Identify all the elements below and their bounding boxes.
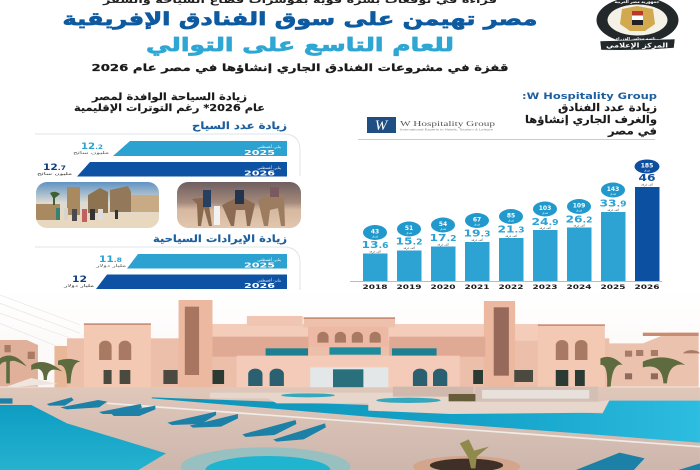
revenue 2025 bar: 2025	[244, 262, 275, 270]
bar 2026	[634, 160, 660, 291]
deck planter	[413, 439, 520, 470]
tourists 2026 bar: يناير- أغسطس	[258, 165, 281, 170]
tourists 2025 bar	[73, 141, 287, 157]
section: tourists heading: زيادة عدد السياح	[192, 121, 287, 132]
revenue 2026 bar: مليار دولار	[62, 283, 94, 288]
tourists 2026 bar	[37, 162, 287, 178]
logo: media center emblem: رئاسة مجلس الوزراء	[616, 36, 659, 41]
panel heading: والغرف الجاري إنشاؤها	[525, 114, 657, 126]
bar 2020: ألف غرفة	[437, 242, 449, 246]
bar 2019	[396, 222, 422, 291]
bar 2022: 85	[507, 212, 515, 220]
revenue 2026 bar	[62, 274, 287, 290]
W Hospitality Group logo: W Hospitality Group	[400, 119, 495, 128]
parasol	[4, 378, 58, 387]
revenue 2025 bar	[94, 254, 287, 270]
panel: hotel projects	[350, 92, 662, 291]
bar 2023: 2023	[532, 284, 558, 291]
bar 2023: ألف غرفة	[539, 226, 551, 230]
bar 2021: 67	[473, 216, 481, 224]
panel: tourism	[35, 92, 301, 290]
bar 2022: 2022	[498, 284, 524, 291]
hotel photo	[0, 290, 700, 470]
sun loungers	[0, 397, 700, 470]
W Hospitality Group logo: International Experts in Hotels, Tourism & Leisure	[400, 128, 494, 132]
bar 2022: 21 .3	[498, 224, 524, 236]
revenue 2026 bar: 2026	[244, 282, 275, 290]
bar 2025: 143	[607, 186, 619, 193]
bar 2021: ألف غرفة	[471, 238, 483, 242]
bar 2020: 2020	[430, 284, 456, 291]
W Hospitality Group logo	[367, 117, 495, 134]
bar 2020: 54	[439, 221, 447, 228]
panel heading: في مصر	[607, 126, 657, 138]
revenue 2025 bar: مليار دولار	[94, 263, 126, 268]
tourists 2025 bar: 2025	[244, 149, 275, 157]
panel heading: زيادة عدد الفنادق	[558, 102, 657, 114]
subtitle: قفزة في مشروعات الفنادق الجاري إنشاؤها في مصر عام 2026	[92, 63, 508, 74]
title line 1: مصر تهيمن على سوق الفنادق الإفريقية	[62, 9, 538, 30]
revenue 2026 bar: 12	[72, 275, 87, 285]
tourists 2026 bar: مليون سائح	[37, 171, 72, 176]
bar 2022	[498, 209, 524, 291]
logo: media center emblem: المركز الإعلامي	[606, 42, 668, 50]
divider	[358, 139, 655, 140]
arched windows	[99, 332, 587, 386]
bar 2021: 19 .3	[464, 228, 490, 240]
pool terrace with jacuzzis	[210, 387, 609, 414]
bar 2023: 24 .9	[532, 217, 558, 228]
bar 2024: فندق	[576, 208, 583, 212]
bar 2018: 2018	[362, 284, 388, 291]
bar 2024: 26 .2	[566, 214, 592, 226]
photo: Karnak temple tourists	[36, 182, 159, 228]
round pool	[181, 447, 350, 470]
tourists 2025 bar: يناير- أغسطس	[258, 144, 281, 149]
bar 2026: ألف غرفة	[641, 182, 653, 186]
bar 2024	[566, 199, 592, 291]
bar 2019: فندق	[406, 231, 413, 235]
bar 2020: فندق	[440, 227, 447, 231]
left foreground pool	[0, 405, 166, 470]
right side wing	[605, 333, 700, 387]
bar 2022: فندق	[508, 218, 515, 222]
main building	[67, 300, 609, 388]
bar 2020: 17 .2	[430, 233, 456, 244]
back pool	[152, 397, 700, 443]
tourists 2025 bar: مليون سائح	[73, 150, 109, 155]
bar 2026: 185	[641, 162, 653, 170]
panel heading	[74, 92, 265, 114]
bar 2023: 103	[539, 205, 551, 212]
panel heading	[522, 92, 658, 138]
panel heading: :W Hospitality Group	[522, 92, 658, 102]
revenue 2026 bar: يناير- أغسطس	[258, 278, 281, 282]
bar 2025: فندق	[610, 192, 617, 196]
bar 2019: 15 .2	[396, 236, 422, 248]
bar 2024: ألف غرفة	[573, 224, 585, 228]
revenue 2025 bar: 11 .8	[99, 255, 123, 265]
bar 2023	[532, 202, 558, 291]
bar 2018: فندق	[372, 234, 379, 238]
bar 2019: 2019	[396, 284, 422, 291]
bar 2022: ألف غرفة	[505, 234, 517, 238]
bar 2026: فندق	[644, 168, 651, 172]
white deck line	[107, 403, 700, 447]
bar 2019: ألف غرفة	[403, 246, 415, 250]
bar 2025	[600, 182, 626, 291]
bar 2026: 2026	[634, 284, 660, 291]
logo: media center emblem	[596, 0, 678, 50]
bar 2021	[464, 213, 490, 291]
bar 2025: 2025	[600, 284, 626, 291]
bar 2026: 46	[638, 173, 656, 184]
bar 2018: ألف غرفة	[369, 249, 381, 253]
bar 2024: 2024	[566, 284, 592, 291]
tourists 2026 bar: 2026	[244, 170, 275, 178]
bar 2021: 2021	[464, 284, 490, 291]
bar 2018	[362, 225, 388, 291]
palm trees	[0, 356, 685, 387]
panel heading: زيادة السياحة الوافدة لمصر	[91, 92, 247, 103]
bar 2024: 109	[573, 202, 585, 210]
bar 2019: 51	[405, 225, 413, 232]
bar 2018: 13 .6	[362, 240, 388, 251]
W Hospitality Group logo: W	[375, 118, 389, 134]
bar 2021: فندق	[474, 222, 481, 226]
section: revenue heading: زيادة الإيرادات السياحية	[153, 234, 287, 245]
deck	[0, 387, 700, 470]
left side wing	[0, 340, 85, 388]
tourists 2025 bar: 12.2	[81, 142, 103, 152]
bar 2018: 43	[371, 228, 379, 236]
revenue 2025 bar: يناير- أغسطس	[258, 257, 281, 262]
bar 2023: فندق	[542, 211, 549, 215]
bar 2020	[430, 218, 456, 291]
bar chart: hotels and rooms by year	[350, 160, 662, 291]
photo: camels in Sinai	[177, 182, 301, 228]
panel heading: عام 2026* رغم التوترات الإقليمية	[74, 103, 265, 114]
tourists 2026 bar: 12 .7	[43, 163, 66, 173]
bar 2025: 33 .9	[600, 198, 626, 210]
title line 2: للعام التاسع على التوالي	[146, 35, 454, 56]
bar 2025: ألف غرفة	[607, 208, 619, 212]
